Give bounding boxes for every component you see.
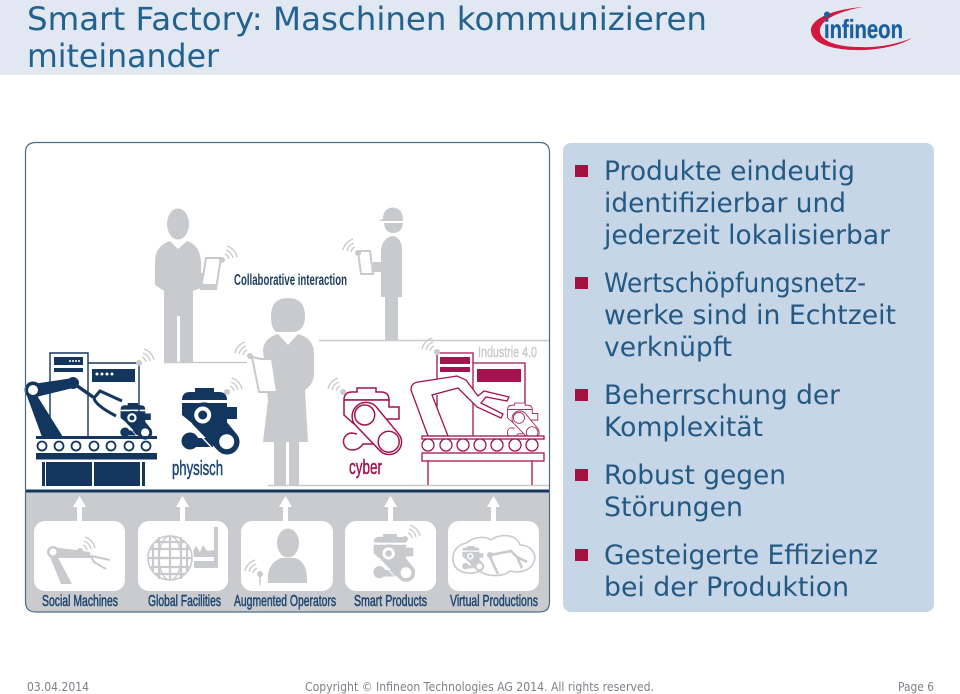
bullet text: Gesteigerte Effizienz <box>604 540 878 571</box>
panel: benefits list <box>563 143 934 612</box>
floor lines <box>164 340 549 486</box>
footer: Page 6 <box>898 680 934 694</box>
title <box>27 0 707 75</box>
tile labels: Social Machines <box>42 593 118 610</box>
title: Smart Factory: Maschinen kommunizieren <box>27 0 707 38</box>
title: miteinander <box>27 37 220 75</box>
panel: smart factory diagram <box>24 142 550 612</box>
label: collaborative interaction: Collaborative interaction <box>234 272 347 289</box>
bullet text: identifizierbar und <box>604 188 846 219</box>
tile labels <box>42 593 538 610</box>
cyber motor <box>344 388 402 455</box>
woman with clipboard <box>252 298 314 485</box>
tile labels: Virtual Productions <box>450 593 538 610</box>
tile labels: Augmented Operators <box>234 593 336 610</box>
logo: Infineon: infineon <box>824 14 903 44</box>
footer: Copyright © Infineon Technologies AG 2014. All rights reserved. <box>305 680 654 694</box>
arrows <box>73 496 500 521</box>
person with tablet left <box>155 208 221 362</box>
footer <box>27 680 934 694</box>
tile labels: Smart Products <box>354 593 427 610</box>
tile labels: Global Facilities <box>148 593 221 610</box>
tile: global facilities <box>138 521 228 591</box>
bullet text: jederzeit lokalisierbar <box>603 220 891 251</box>
tile: social machines <box>34 521 125 591</box>
physical robot cell <box>24 353 157 486</box>
bullet text: Produkte eindeutig <box>604 156 855 187</box>
bullet text: Komplexität <box>604 412 763 443</box>
label: physisch: physisch <box>172 458 223 480</box>
label: Industrie 4.0: Industrie 4.0 <box>478 344 537 361</box>
bullet text: Beherrschung der <box>604 380 841 411</box>
bullet text: bei der Produktion <box>604 572 849 603</box>
tile: virtual productions <box>448 521 539 591</box>
bullet text: Wertschöpfungsnetz- <box>604 268 866 299</box>
physical motor <box>182 388 240 455</box>
panel border <box>26 142 550 612</box>
bullet text <box>603 156 896 603</box>
tile: smart products <box>345 521 436 591</box>
bullet text: werke sind in Echtzeit <box>604 300 896 331</box>
cyber robot cell <box>411 353 544 485</box>
grey foundation band <box>26 491 550 612</box>
label: cyber: cyber <box>349 457 382 479</box>
bullet squares <box>575 165 588 561</box>
footer: 03.04.2014 <box>27 680 89 694</box>
bullet text: Robust gegen <box>604 460 786 491</box>
logo: Infineon <box>811 7 912 50</box>
bullet text: verknüpft <box>604 332 732 363</box>
header band <box>0 0 960 75</box>
tile: augmented operators <box>241 521 333 591</box>
person with cap right <box>358 208 403 340</box>
bullet text: Störungen <box>604 492 743 523</box>
